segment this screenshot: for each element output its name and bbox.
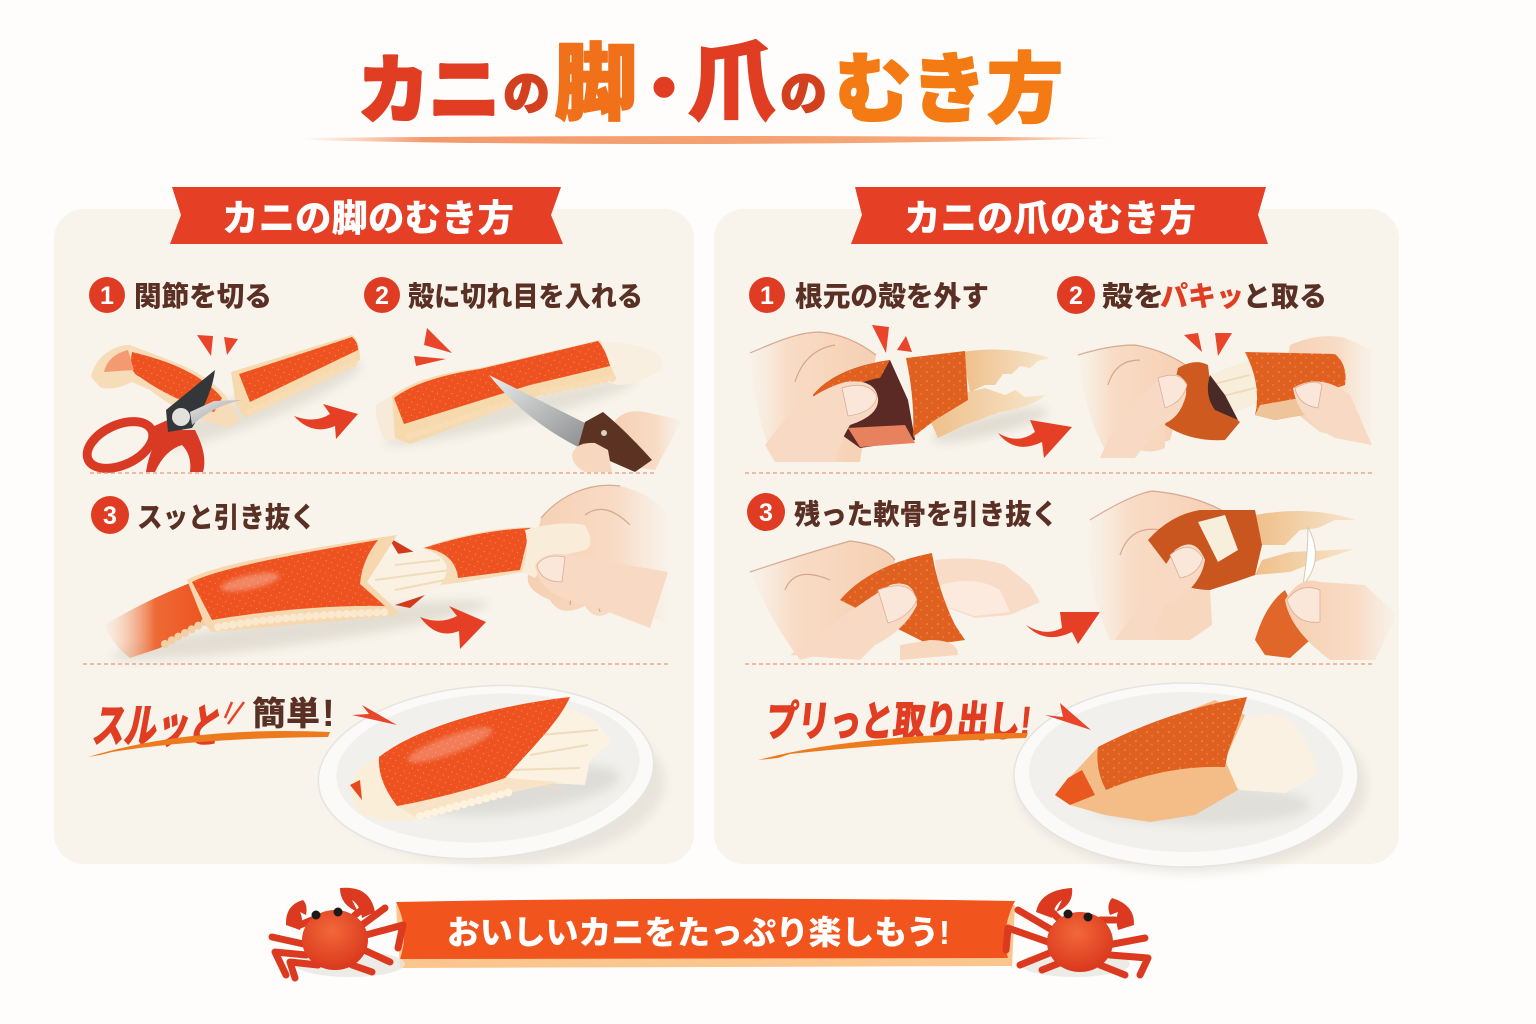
thumb — [535, 554, 668, 628]
step 3 label: 3 — [759, 499, 773, 527]
title: 脚 — [554, 37, 638, 131]
meat — [935, 558, 1040, 618]
thumb — [1115, 544, 1205, 640]
section banner: カニの爪のむき方 — [904, 198, 1196, 239]
spark marks — [872, 325, 889, 353]
cartilage — [1303, 527, 1315, 585]
section banner — [170, 187, 563, 244]
section banner: カニの脚のむき方 — [222, 198, 514, 239]
arrow step 3 — [420, 606, 486, 649]
lower finger — [900, 640, 958, 660]
step 3 label — [747, 493, 1058, 531]
hand — [750, 541, 895, 660]
icon: crab left — [272, 888, 405, 978]
panel background — [54, 209, 694, 864]
spark marks — [197, 335, 213, 356]
lower finger — [1135, 425, 1165, 452]
callout: slick and easy: スルッと — [89, 700, 227, 752]
arrow step 1 to 2 — [294, 404, 358, 439]
pointer arrow — [352, 705, 397, 725]
upper hand — [1089, 491, 1225, 640]
broken shell — [813, 360, 915, 448]
spark marks — [1184, 333, 1202, 352]
left shell — [1165, 362, 1240, 440]
step 1 label: 根元の殻を外す — [795, 281, 989, 312]
step 2 label: パキッ — [1160, 281, 1244, 312]
step 2 label: 殻を — [1102, 281, 1164, 312]
panel background — [714, 209, 1399, 864]
second shell piece — [422, 527, 545, 585]
left hand — [1078, 345, 1190, 458]
knife — [489, 375, 652, 472]
step 2 label — [1057, 276, 1327, 314]
bottom banner — [396, 899, 1015, 968]
pincers — [1255, 511, 1356, 545]
shell — [840, 553, 965, 645]
panel: crab leg — [54, 187, 694, 870]
step 2 illustration: two hands and claw — [1078, 333, 1372, 458]
claw rim — [1055, 700, 1245, 822]
section banner — [851, 187, 1268, 244]
title: ・ — [629, 51, 699, 129]
pointer arrow — [1045, 703, 1091, 730]
step 2 label: 殻に切れ目を入れる — [408, 281, 643, 312]
orange shell — [1097, 697, 1247, 790]
title: カニ — [358, 49, 500, 132]
plate with claw meat — [1014, 683, 1367, 873]
icon: crab right — [1006, 888, 1148, 977]
scissors — [80, 370, 242, 478]
hand back — [528, 485, 668, 625]
meat — [352, 757, 418, 820]
panel: crab claw — [714, 187, 1399, 873]
step 1 label — [89, 277, 272, 313]
lower finger — [572, 443, 612, 472]
step 1 label: 関節を切る — [134, 280, 272, 312]
step 2 illustration: leg and knife — [376, 328, 682, 472]
step 1 illustration: leg and scissors — [80, 335, 368, 478]
step 1 illustration: hand and claw — [750, 325, 1051, 462]
divider — [90, 472, 655, 474]
broken shell piece — [1255, 590, 1310, 658]
ribbon light edge — [396, 905, 1015, 968]
red inner lining — [388, 537, 414, 560]
claw body — [1148, 510, 1262, 590]
left thumb — [1100, 374, 1186, 458]
thumb — [790, 584, 917, 660]
crab body — [1047, 912, 1113, 972]
step 2 label: 2 — [1069, 282, 1083, 310]
step 3 label: 3 — [103, 502, 117, 530]
shell — [379, 697, 570, 806]
step 1 label — [749, 277, 989, 313]
crab claws — [340, 888, 375, 918]
crab body — [302, 910, 368, 970]
crab claws — [1036, 888, 1072, 918]
divider — [745, 663, 1375, 665]
step 3 label — [91, 496, 316, 534]
plate with peeled leg — [312, 674, 665, 870]
arrow step 1 to 2 — [998, 420, 1072, 458]
title — [358, 33, 1063, 133]
step 3 label: 残った軟骨を引き抜く — [794, 498, 1058, 530]
step 3 illustration B: hands, claw and cartilage — [1089, 491, 1397, 660]
pincers — [962, 350, 1050, 392]
step 1 label: 1 — [100, 282, 114, 310]
hand — [612, 411, 682, 470]
spark marks — [424, 328, 452, 353]
title: の — [780, 67, 827, 120]
callout: slick and easy — [88, 693, 335, 757]
right thumb — [1293, 381, 1372, 445]
thin leg — [105, 583, 206, 658]
step 3 illustration A: hand pulling meat — [750, 541, 1040, 660]
right shell — [1245, 352, 1346, 420]
lower fingers — [1150, 590, 1212, 640]
arrow step 3 — [1026, 612, 1100, 644]
hand — [750, 332, 876, 462]
main shell — [187, 535, 399, 632]
title: 爪 — [688, 33, 776, 132]
divider — [83, 663, 668, 665]
white meat — [1220, 714, 1316, 793]
claw band — [906, 351, 968, 437]
ribbon — [396, 899, 1015, 959]
title underline — [300, 136, 1120, 144]
lower hand — [1285, 580, 1397, 660]
callout: slick and easy: ! — [322, 693, 335, 735]
callout: slick and easy: 簡単 — [252, 695, 320, 732]
step 2 label — [364, 277, 643, 313]
title: の — [503, 67, 550, 120]
step 2 label: 2 — [375, 282, 389, 310]
step 3 label: スッと引き抜く — [137, 502, 316, 533]
title: むき方 — [835, 48, 1063, 133]
callout: plump extraction: プリっと取り出し! — [764, 698, 1034, 745]
divider — [745, 472, 1375, 474]
slogan: おいしいカニをたっぷり楽しもう! — [447, 914, 950, 951]
step 3 illustration: long leg and hand — [105, 485, 668, 670]
step 1 label: 1 — [760, 282, 774, 310]
right hand — [1280, 336, 1372, 445]
callout: plump extraction — [758, 698, 1034, 760]
meat — [365, 545, 470, 600]
meat — [1200, 358, 1265, 412]
step 2 label: と取る — [1243, 281, 1327, 312]
thumb — [765, 381, 878, 462]
